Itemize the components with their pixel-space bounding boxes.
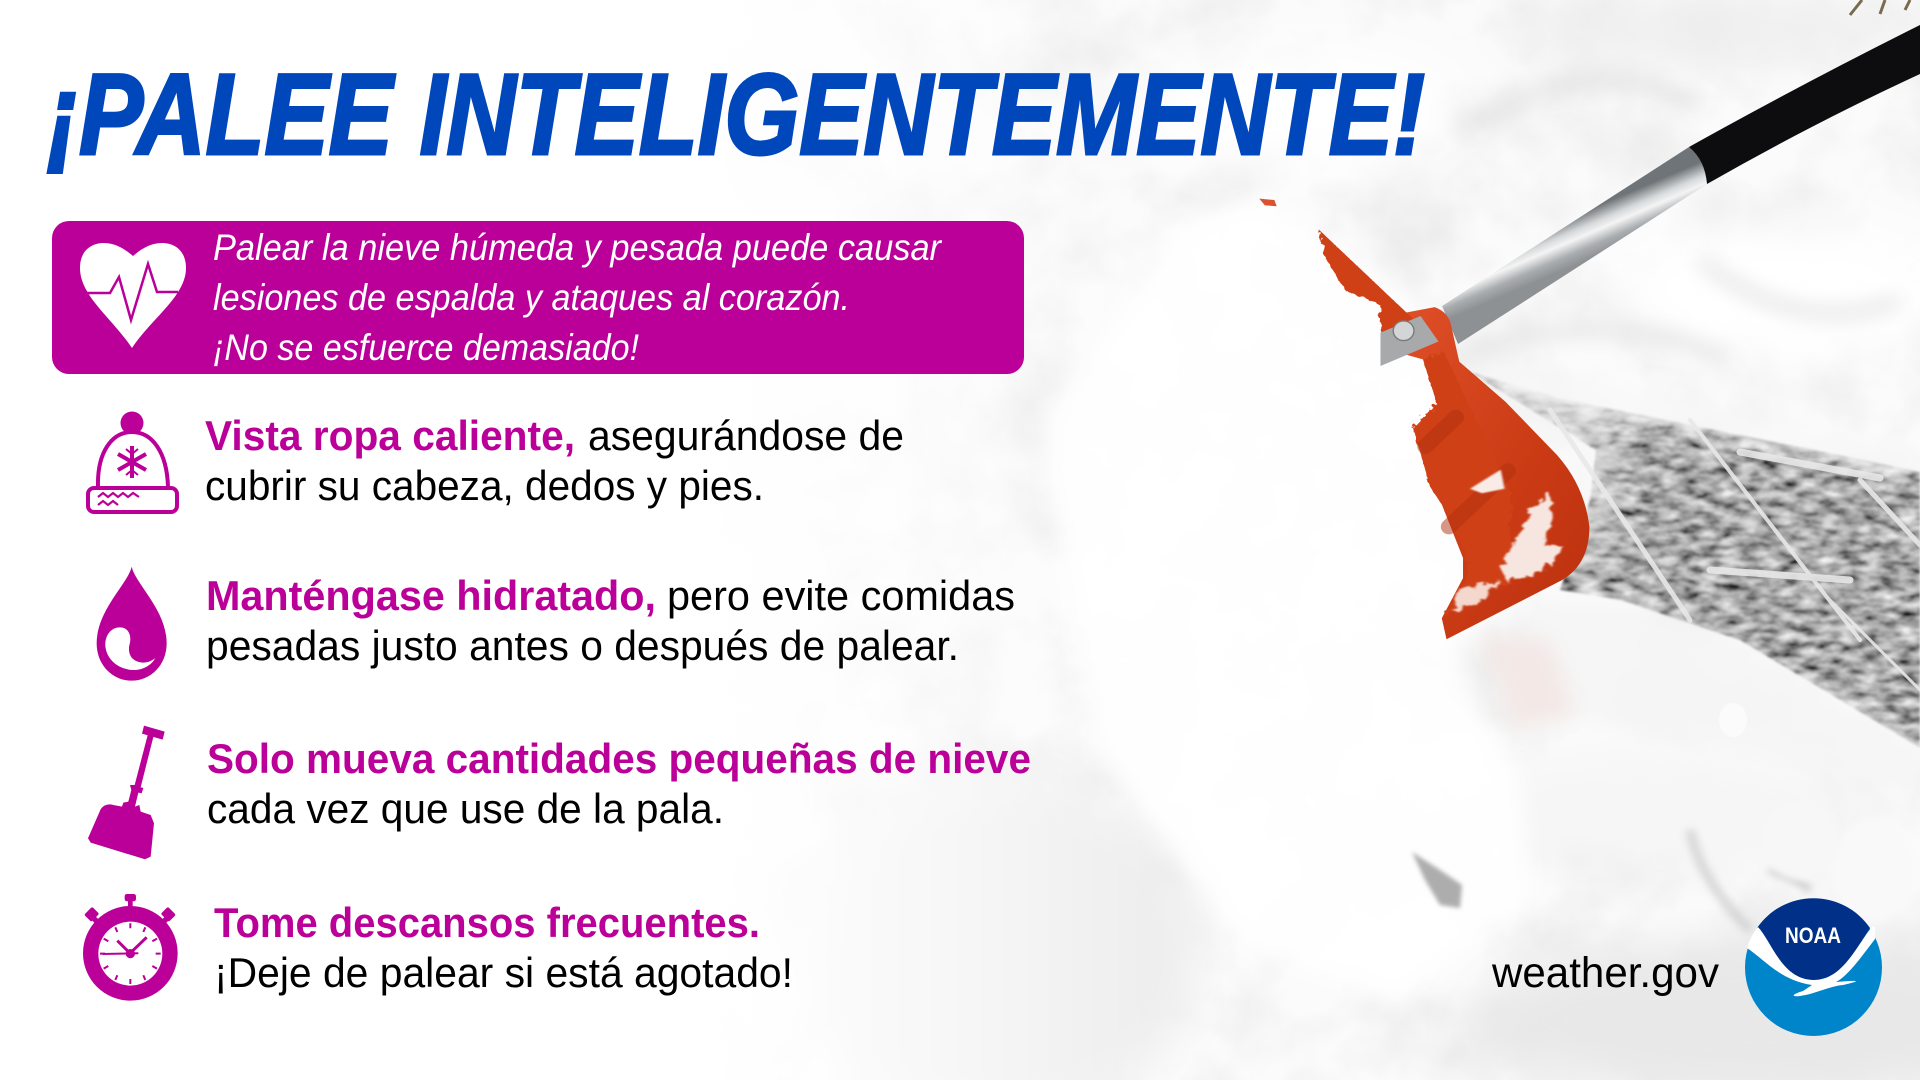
tip text	[207, 735, 1031, 832]
icon: stopwatch	[83, 894, 178, 1001]
tip: warm clothes	[88, 412, 904, 512]
icon: NOAA logo: NOAA	[1785, 923, 1841, 948]
tip text: Solo mueva cantidades pequeñas de nieve	[207, 735, 1031, 782]
driveway pavement	[1460, 350, 1920, 790]
warning text: Palear la nieve húmeda y pesada puede causar	[213, 227, 943, 268]
tip text: pero evite comidas	[667, 572, 1015, 619]
tip text: Vista ropa caliente,	[205, 412, 575, 459]
tip text	[205, 412, 904, 509]
tip text: asegurándose de	[588, 412, 904, 459]
tip: small loads	[88, 726, 1031, 859]
tip text: cada vez que use de la pala.	[207, 785, 724, 832]
icon: heart with pulse	[80, 243, 186, 348]
shovel metal shaft	[1442, 147, 1707, 344]
icon: shovel	[88, 726, 165, 859]
warning text: ¡No se esfuerce demasiado!	[213, 327, 639, 368]
panel: warning banner	[52, 221, 1024, 374]
icon: winter hat	[88, 412, 177, 512]
snow pile	[1040, 200, 1530, 1000]
tip text: Manténgase hidratado,	[206, 572, 656, 619]
icon: NOAA logo	[1745, 898, 1882, 1036]
tip text	[214, 899, 793, 996]
tip text: cubrir su cabeza, dedos y pies.	[205, 462, 764, 509]
icon: water drop	[97, 567, 167, 681]
tip text	[206, 572, 1015, 669]
snow details over pile	[1412, 635, 1575, 908]
tip: frequent breaks	[83, 894, 793, 1001]
warning text: lesiones de espalda y ataques al corazón.	[213, 277, 850, 318]
tip text: Tome descansos frecuentes.	[214, 899, 760, 946]
warning text	[213, 227, 943, 368]
tip text: ¡Deje de palear si está agotado!	[214, 949, 793, 996]
snow details	[1450, 0, 1917, 930]
title: ¡PALEE INTELIGENTEMENTE!	[47, 51, 1425, 179]
shovel orange blade	[1259, 199, 1589, 639]
tip text: pesadas justo antes o después de palear.	[206, 622, 959, 669]
shovel black grip	[1689, 25, 1920, 184]
photo: snow shovel	[1259, 25, 1920, 639]
tip: hydration	[97, 567, 1015, 681]
website link: weather.gov	[1491, 949, 1719, 997]
